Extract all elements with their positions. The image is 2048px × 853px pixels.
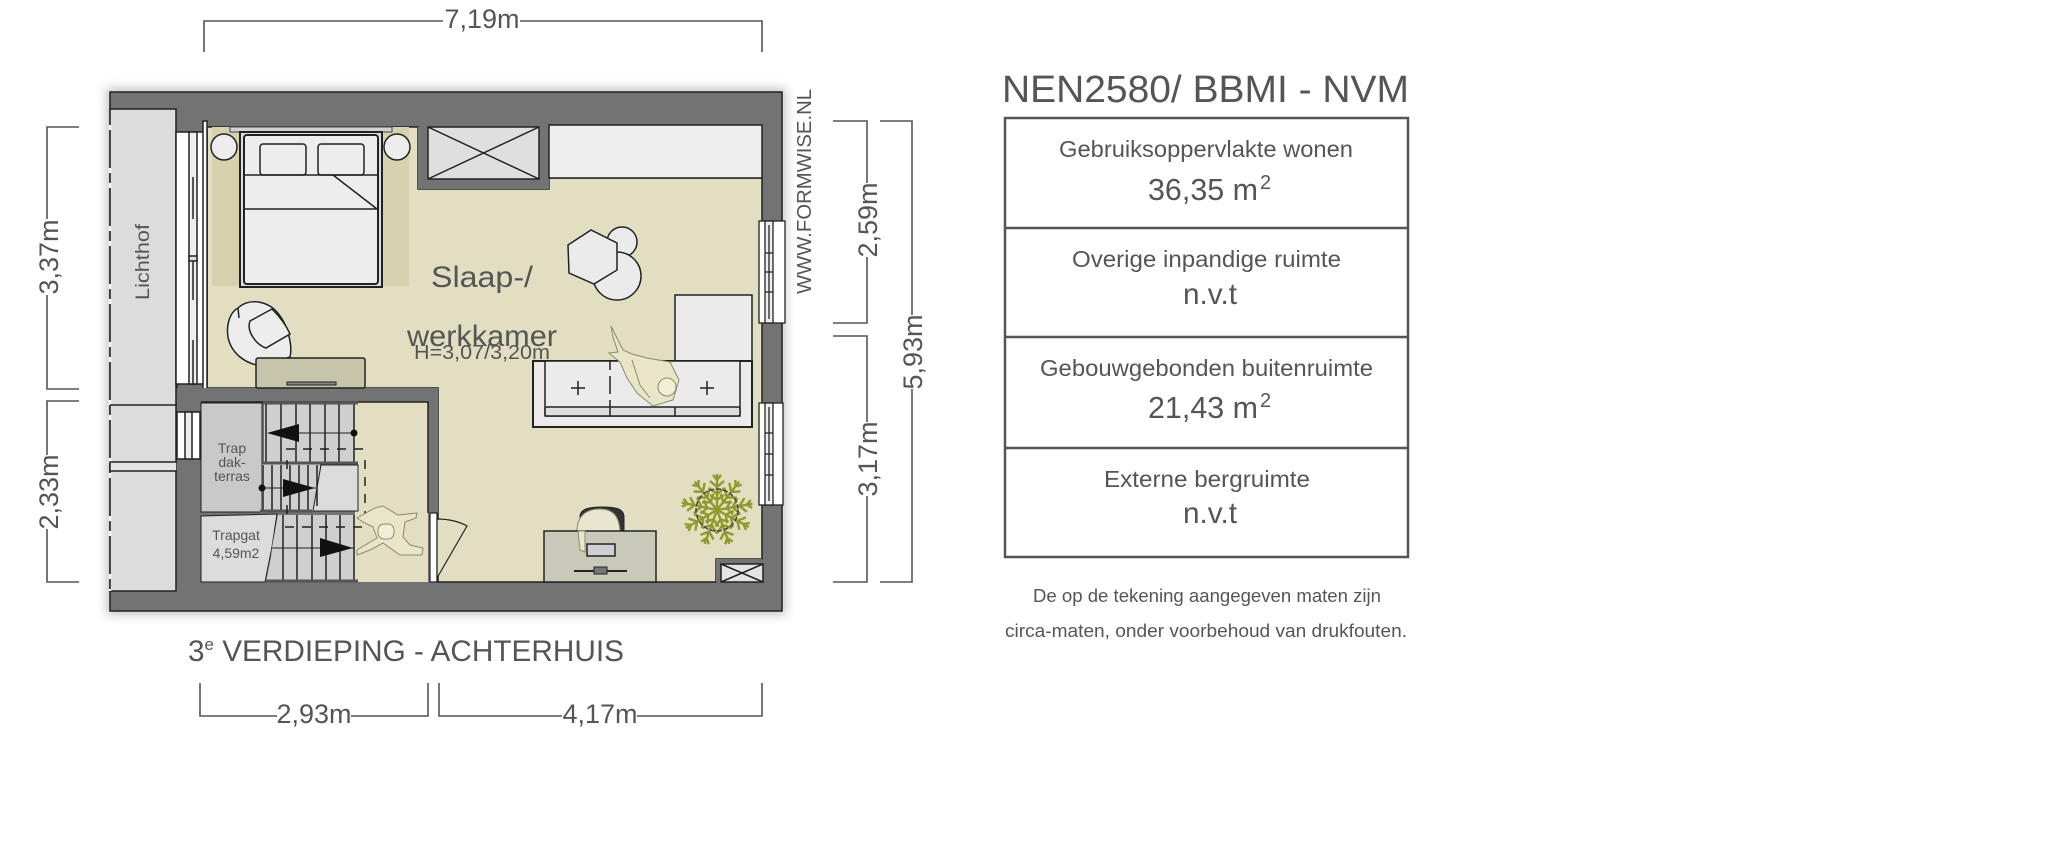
floor title: VERDIEPING - ACHTERHUIS [214, 635, 624, 668]
disclaimer: De op de tekening aangegeven maten zijn [1033, 586, 1381, 606]
dimension: 3,37m [34, 127, 79, 389]
dimension: 4,17m: 4,17m [562, 699, 638, 729]
dimension: 7,19m [204, 4, 762, 52]
row: externe bergruimte: Externe bergruimte [1104, 466, 1310, 492]
armchair [227, 302, 291, 366]
staircase [201, 403, 366, 582]
dimension: 7,19m: 7,19m [444, 4, 520, 34]
floor plan [106, 88, 786, 615]
dimension: 3,17m [833, 336, 883, 582]
window: small stair window [177, 412, 200, 459]
room name: H=3,07/3,20m [414, 342, 550, 364]
floor title: 3 [188, 635, 205, 668]
row: gebruiksoppervlakte [1059, 136, 1353, 207]
dimension: 2,33m: 2,33m [34, 454, 64, 530]
person on sofa [609, 326, 679, 406]
row: overige inpandige ruimte: n.v.t [1183, 278, 1238, 311]
dimension: 2,33m [34, 401, 79, 582]
middle flight and landing [258, 463, 358, 511]
upper flight [263, 403, 358, 462]
dimension: 3,37m: 3,37m [34, 219, 64, 295]
shaft top [418, 127, 549, 189]
desk with monitor [544, 507, 656, 582]
outer walls [110, 92, 782, 611]
dimension: 2,93m [200, 683, 428, 729]
row: gebouwgebonden buitenruimte [1040, 355, 1373, 425]
row: gebouwgebonden buitenruimte: 2 [1260, 390, 1271, 412]
room floor: slaap-/werkkamer [207, 127, 762, 582]
trapgat: Trapgat [212, 527, 260, 543]
person on landing [357, 506, 423, 555]
coffee tables [568, 227, 641, 300]
bed with rug and nightstands [211, 127, 410, 287]
door [430, 513, 467, 582]
room name: Slaap-/ [431, 261, 534, 294]
vanity table [256, 358, 365, 388]
ottoman [675, 295, 752, 361]
website label: WWW.FORMWISE.NL [794, 89, 816, 294]
trapgat [201, 514, 277, 582]
room name: werkkamer [406, 320, 557, 353]
window: lichthof side [176, 121, 207, 392]
row: gebouwgebonden buitenruimte: 21,43 m [1148, 390, 1258, 425]
lichthof: Lichthof [133, 223, 154, 300]
row: overige inpandige ruimte [1072, 246, 1341, 311]
shaft bottom right [716, 559, 763, 582]
dimension: 4,17m [439, 683, 762, 729]
lower flight [266, 515, 358, 582]
closet: trap dakterras [201, 403, 262, 512]
row: externe bergruimte: n.v.t [1183, 497, 1238, 530]
room name [406, 261, 557, 364]
dimension: 3,17m: 3,17m [853, 421, 883, 497]
trapgat: 4,59m2 [213, 545, 260, 561]
wall block beneath window [177, 388, 438, 402]
lichthof [110, 109, 177, 591]
plant [680, 474, 754, 547]
disclaimer [1005, 586, 1407, 641]
area table [1005, 118, 1408, 557]
wardrobe: white cabinet [549, 125, 762, 178]
dimension: 2,59m: 2,59m [853, 182, 883, 258]
row: gebruiksoppervlakte: 36,35 m [1148, 172, 1258, 207]
row: overige inpandige ruimte: Overige inpandige ruimte [1072, 246, 1341, 272]
closet: trap dakterras: Trap [218, 440, 246, 456]
dimension: 2,93m: 2,93m [276, 699, 352, 729]
disclaimer: circa-maten, onder voorbehoud van drukfouten. [1005, 621, 1407, 641]
row: gebouwgebonden buitenruimte: Gebouwgebonden buitenruimte [1040, 355, 1373, 381]
dimension: 2,59m [833, 121, 883, 323]
sofa [533, 361, 752, 427]
floor title: e [205, 635, 214, 654]
dimension: 5,93m: 5,93m [898, 314, 928, 390]
row: gebruiksoppervlakte: 2 [1260, 172, 1271, 194]
dimension: 5,93m [880, 121, 928, 582]
table heading: NEN2580/ BBMI - NVM [1002, 69, 1409, 111]
row: externe bergruimte [1104, 466, 1310, 530]
row: gebruiksoppervlakte: Gebruiksoppervlakte wonen [1059, 136, 1353, 162]
right wall windows [759, 221, 785, 505]
closet: trap dakterras: terras [214, 468, 250, 484]
closet: trap dakterras: dak- [218, 454, 246, 470]
landing floor [355, 402, 428, 582]
